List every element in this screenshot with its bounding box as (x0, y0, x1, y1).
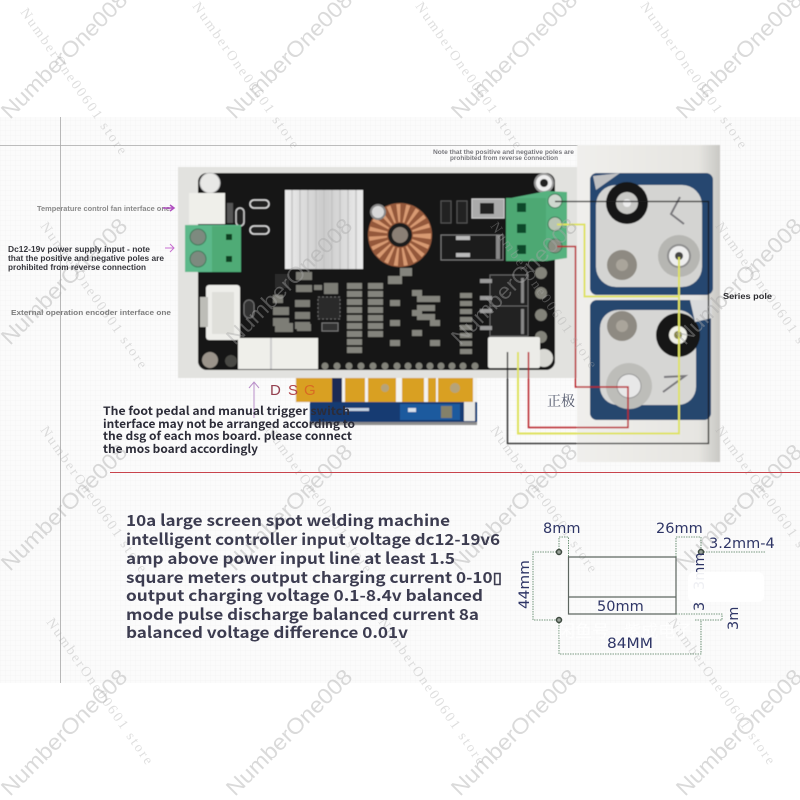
watermarks: NumberOne008: NumberOne008 (446, 664, 582, 800)
label: DSG: D (270, 382, 281, 399)
resale watermark patch (688, 572, 764, 602)
watermarks: store: NumberOne00601 store (487, 424, 600, 576)
label: DSG: S (288, 382, 298, 399)
label: power input: that the positive and negative poles are (8, 254, 165, 263)
label: polarity note: prohibited from reverse connection (450, 155, 558, 162)
left power terminal (185, 225, 241, 272)
watermarks: NumberOne008: NumberOne008 (221, 664, 357, 800)
watermarks: NumberOne008: NumberOne008 (221, 213, 357, 350)
label: power input: Dc12-19v power supply input - note (8, 245, 151, 254)
watermarks: store: NumberOne00601 store (637, 0, 750, 152)
watermarks: store: NumberOne00601 store (37, 220, 150, 372)
dimension labels: 50mm (597, 599, 644, 615)
watermarks: NumberOne008: NumberOne008 (671, 664, 800, 800)
arrow: power input (165, 244, 174, 252)
upper right power parts (441, 199, 504, 260)
small SMD parts, left group (273, 272, 340, 332)
specification text block (126, 509, 502, 643)
watermarks: NumberOne008: NumberOne008 (671, 213, 800, 350)
dimension labels: 84MM (607, 636, 653, 652)
label: polarity note: Note that the positive and negative poles are (433, 149, 574, 156)
label: trigger note: the mos board accordingly (103, 441, 258, 457)
fan connector (189, 193, 225, 224)
wire: red (528, 246, 628, 428)
divider: red rule (110, 472, 800, 474)
dimension labels: 3 (692, 602, 708, 611)
dimension labels: 8mm (543, 521, 580, 537)
label: positive pole: 正极 (547, 393, 575, 410)
MOS board (295, 378, 477, 425)
label: encoder interface: External operation encoder interface one (11, 308, 171, 317)
watermarks: store: NumberOne00601 store (412, 0, 525, 152)
specification text block: square meters output charging current 0-10▯ (126, 566, 502, 588)
specification text block: mode pulse discharge balanced current 8a (126, 603, 479, 625)
dimension labels: 44mm (517, 560, 533, 609)
label: polarity note (433, 149, 574, 162)
mounting holes (556, 550, 704, 622)
watermarks: store: NumberOne00601 store (665, 616, 778, 768)
watermarks: store: NumberOne00601 store (487, 220, 600, 372)
arrow: DSG (249, 382, 259, 418)
specification text block: amp above power input line at least 1.5 (126, 547, 455, 569)
label: trigger note: The foot pedal and manual trigger switch (103, 403, 350, 419)
label: trigger note (103, 403, 355, 457)
watermarks: store: NumberOne00601 store (37, 424, 150, 576)
heatsink (285, 190, 363, 269)
specification text block: 10a large screen spot welding machine (126, 509, 450, 531)
watermarks: NumberOne008: NumberOne008 (221, 439, 357, 576)
watermarks: store: NumberOne00601 store (375, 616, 488, 768)
label: trigger note: interface may not be arranged according to (103, 416, 355, 432)
trigger connector (238, 338, 318, 369)
dimension labels: 26mm (656, 521, 703, 537)
watermarks: store: NumberOne00601 store (262, 424, 375, 576)
dimension labels: 3mm (692, 553, 708, 590)
label: trigger note: the dsg of each mos board. please connect (103, 428, 352, 444)
watermarks: NumberOne008: NumberOne008 (671, 439, 800, 576)
photo backdrop: board (178, 167, 578, 378)
resale watermark text: 闲鱼号 · 紫成电子 (558, 622, 692, 641)
bottom right connector (488, 337, 540, 368)
dimension drawing (517, 521, 775, 654)
wire: black (508, 202, 708, 444)
watermarks: NumberOne008: NumberOne008 (446, 213, 582, 350)
label: DSG (270, 382, 316, 399)
dashed dimension lines (533, 537, 765, 654)
small SMD parts, centre columns (347, 268, 472, 354)
specification text block: output charging voltage 0.1-8.4v balanced (126, 584, 483, 606)
photo: control board and batteries (178, 145, 720, 462)
dimension labels: 3m (726, 607, 742, 630)
label: power input: prohibited from reverse connection (8, 263, 146, 272)
watermarks: store: NumberOne00601 store (189, 0, 302, 152)
specification text block: balanced voltage difference 0.01v (126, 621, 408, 643)
encoder connector (200, 285, 240, 340)
watermarks: store: NumberOne00601 store (43, 616, 156, 768)
arrow: fan interface (163, 205, 174, 211)
dimension labels: 3.2mm-4 (709, 536, 775, 552)
label: power input (8, 245, 165, 272)
MOSFETs (480, 275, 528, 336)
dimension labels (517, 521, 775, 652)
right output terminal (506, 191, 567, 261)
watermarks: NumberOne008: NumberOne008 (446, 439, 582, 576)
board outline (568, 557, 676, 614)
wire: yellow (518, 224, 679, 434)
label: fan interface: Temperature control fan interface one (37, 204, 170, 213)
right side and bottom pads (322, 267, 547, 370)
toroid inductor (367, 202, 433, 268)
label: DSG: G (304, 382, 316, 399)
label: series pole: Series pole (723, 292, 773, 301)
battery: top cell (590, 173, 713, 295)
watermarks: store: NumberOne00601 store (17, 6, 130, 158)
PCB (198, 173, 555, 370)
battery: bottom cell (590, 300, 712, 420)
specification text block: intelligent controller input voltage dc12-19v6 (126, 528, 500, 550)
photo backdrop: batteries (577, 145, 720, 462)
